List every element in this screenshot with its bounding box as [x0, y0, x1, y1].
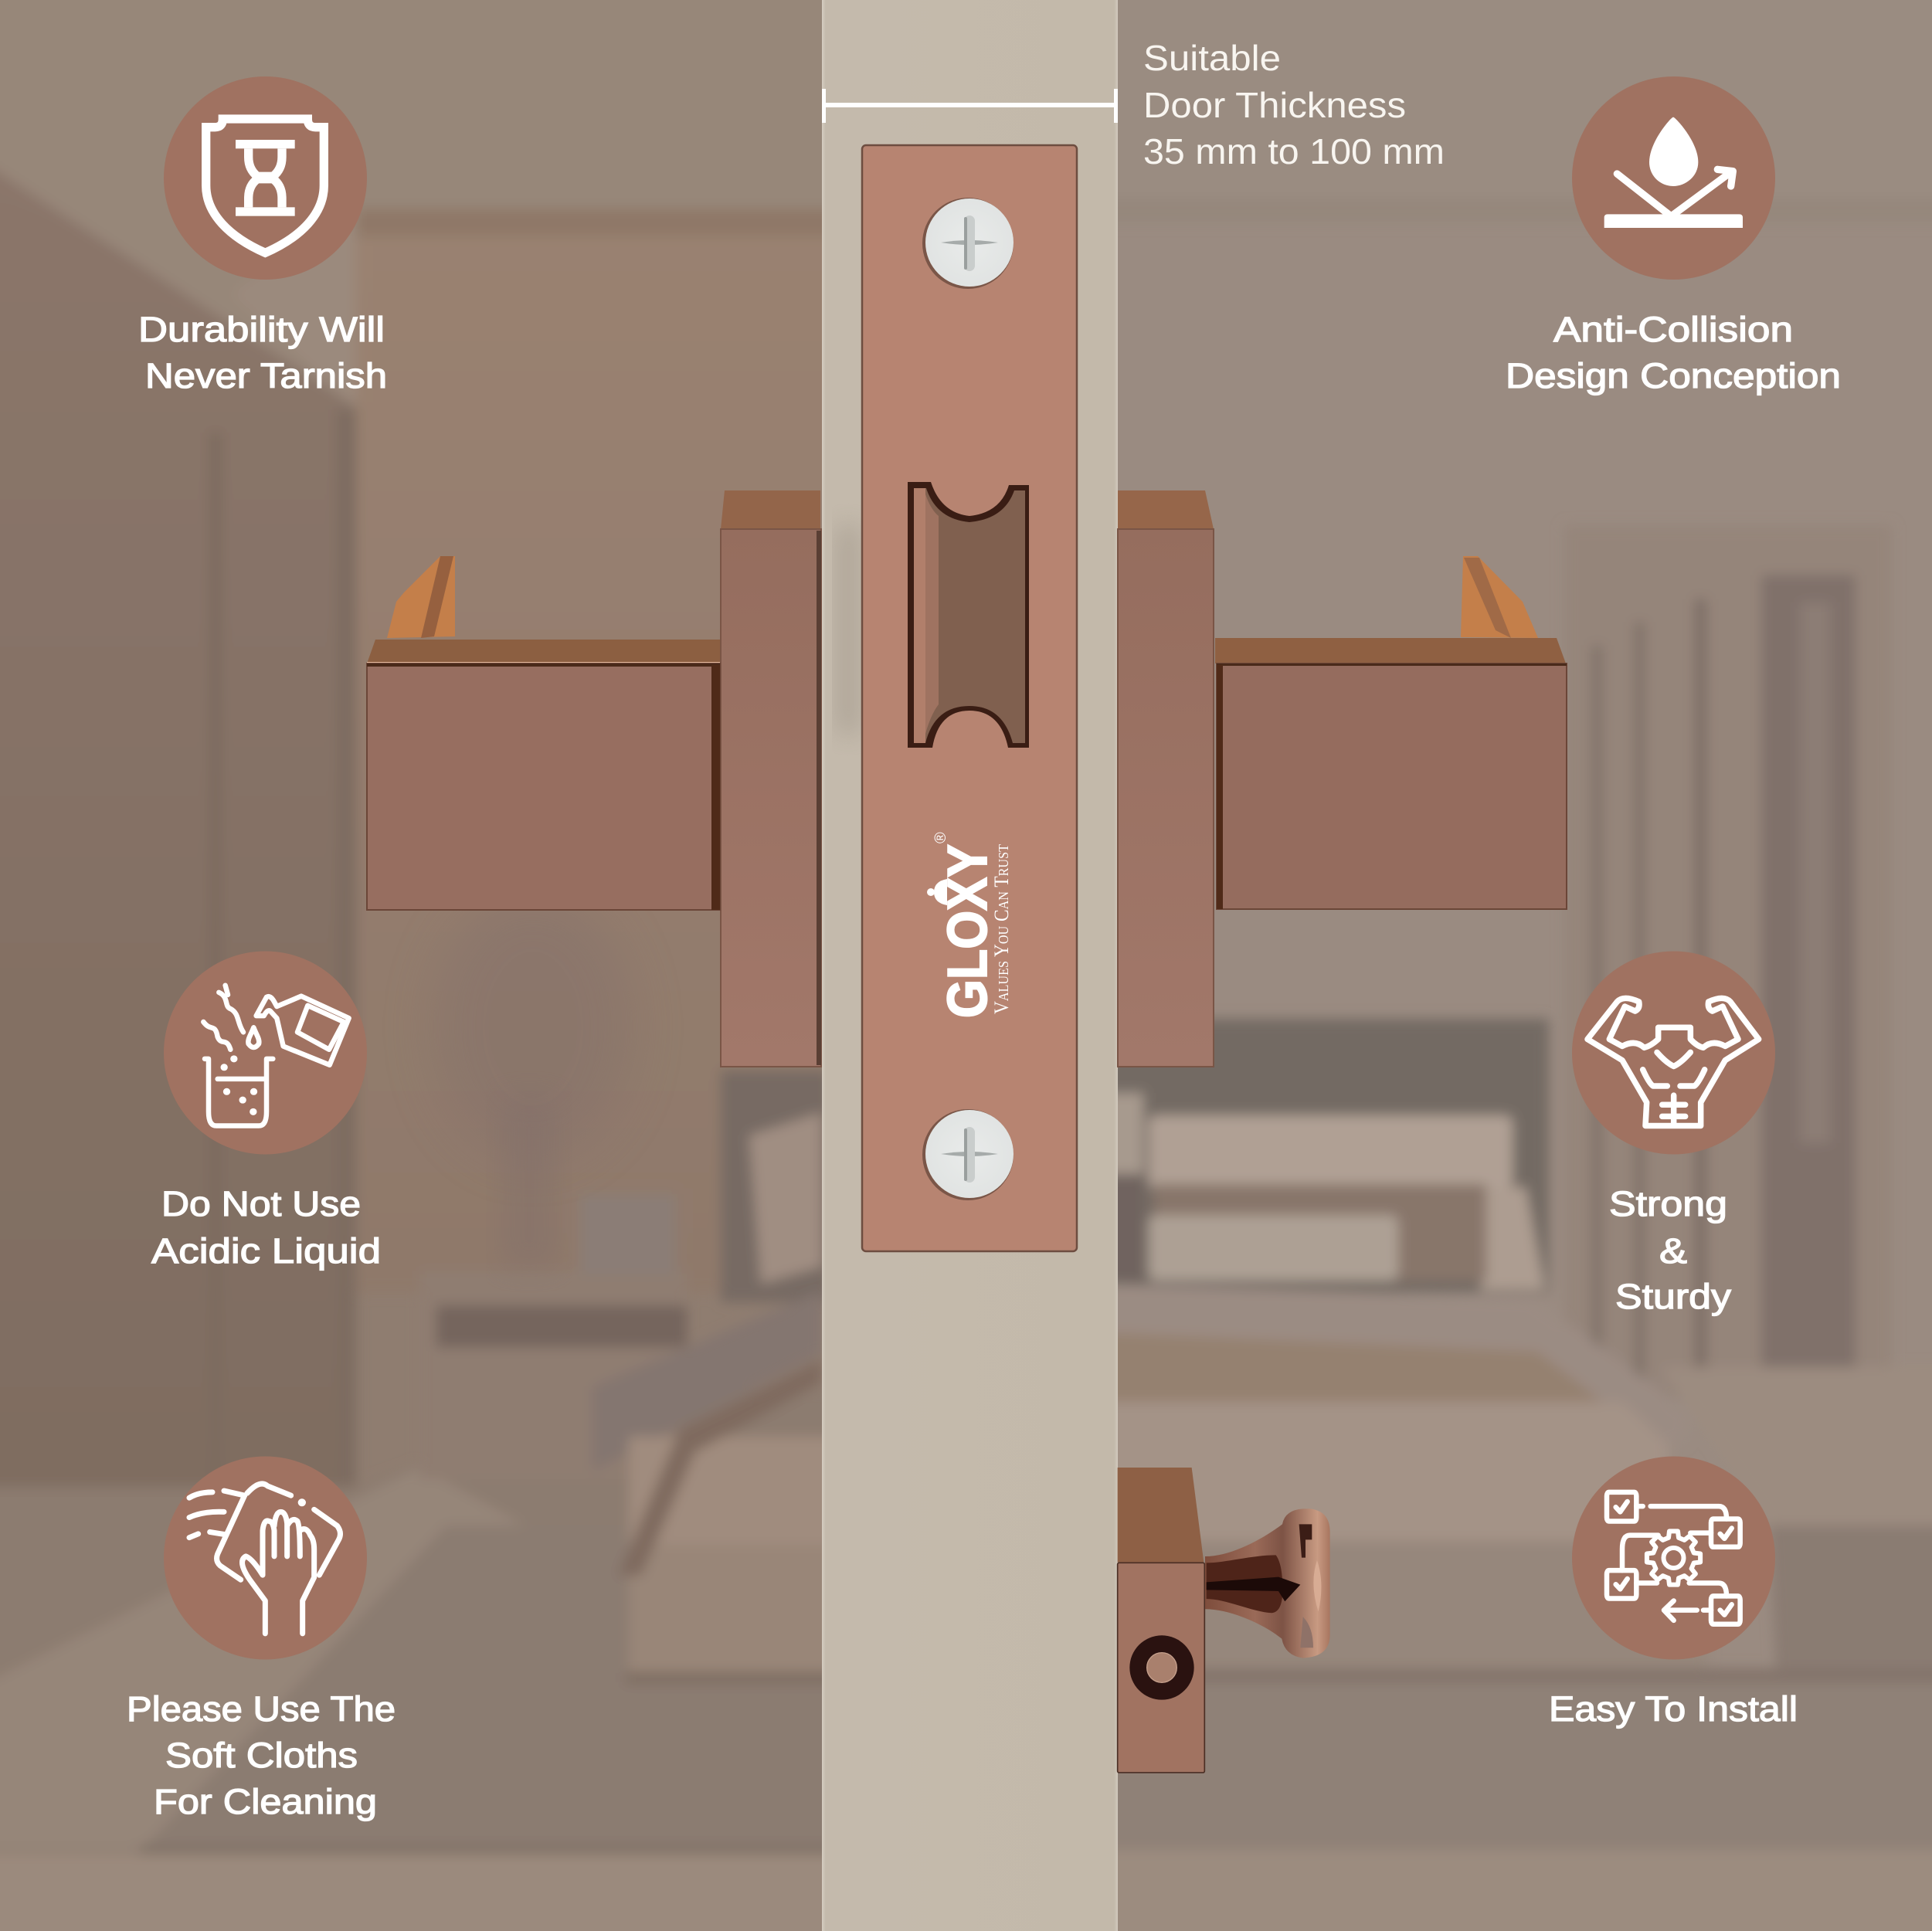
icon: muscular torso [1587, 998, 1759, 1125]
label: Sturdy [1615, 1277, 1732, 1316]
brand logo [927, 832, 1013, 1018]
door edge [822, 0, 1118, 1931]
icon: shield with hourglass [206, 119, 324, 253]
badge circle [164, 952, 367, 1154]
brand logo: Values You Can Trust [990, 844, 1013, 1014]
label [151, 1184, 381, 1271]
label: For Cleaning [154, 1782, 377, 1821]
door thickness label: Suitable [1143, 38, 1281, 78]
label: Easy To Install [1549, 1689, 1798, 1729]
brand logo: GLOXY [937, 844, 999, 1018]
bottom screw [922, 1109, 1014, 1200]
background: blurred bedroom, left side [0, 0, 853, 1931]
latch slot [908, 482, 1029, 748]
door shadow behind plate [838, 525, 858, 734]
thumb turn knob [1118, 1468, 1330, 1773]
feature: soft cloth cleaning [127, 1457, 396, 1821]
label [138, 310, 387, 395]
label: Strong [1609, 1184, 1727, 1223]
badge circle [164, 76, 367, 280]
door thickness dimension line [822, 89, 1118, 123]
feature: no acidic liquid [151, 952, 381, 1271]
label: Acidic Liquid [151, 1231, 381, 1271]
door thickness label: 35 mm to 100 mm [1143, 131, 1445, 171]
label: Please Use The [127, 1689, 396, 1729]
label: Do Not Use [161, 1184, 361, 1223]
label: Design Conception [1506, 356, 1841, 395]
feature: durability [138, 76, 387, 395]
door thickness label [1143, 38, 1445, 171]
icon: bottle pouring into beaker [203, 986, 349, 1125]
label: Never Tarnish [145, 356, 387, 395]
icon: droplet bouncing off surface [1604, 117, 1743, 228]
background: blurred bedroom, right side [1097, 0, 1932, 1931]
feature: anti-collision [1506, 76, 1841, 395]
right lever handle and rose [1118, 490, 1567, 1067]
label [1506, 310, 1841, 395]
icon: hand wiping with cloth [189, 1484, 340, 1634]
badge circle [1572, 1457, 1775, 1659]
label: Anti-Collision [1553, 310, 1793, 349]
feature: strong and sturdy [1572, 952, 1775, 1316]
badge circle [1572, 952, 1775, 1154]
label: Durability Will [138, 310, 385, 349]
feature: easy to install [1549, 1457, 1798, 1729]
badge circle [164, 1457, 367, 1659]
top screw [922, 198, 1014, 289]
label: & [1659, 1231, 1687, 1271]
brand logo: ® [932, 832, 949, 843]
label: Soft Cloths [165, 1736, 358, 1775]
label [127, 1689, 396, 1821]
icon: workflow with gear [1607, 1492, 1740, 1624]
left lever handle and rose [367, 490, 821, 1067]
badge circle [1572, 76, 1775, 280]
label [1609, 1184, 1732, 1316]
lock faceplate [862, 145, 1077, 1251]
door thickness label: Door Thickness [1143, 85, 1406, 125]
